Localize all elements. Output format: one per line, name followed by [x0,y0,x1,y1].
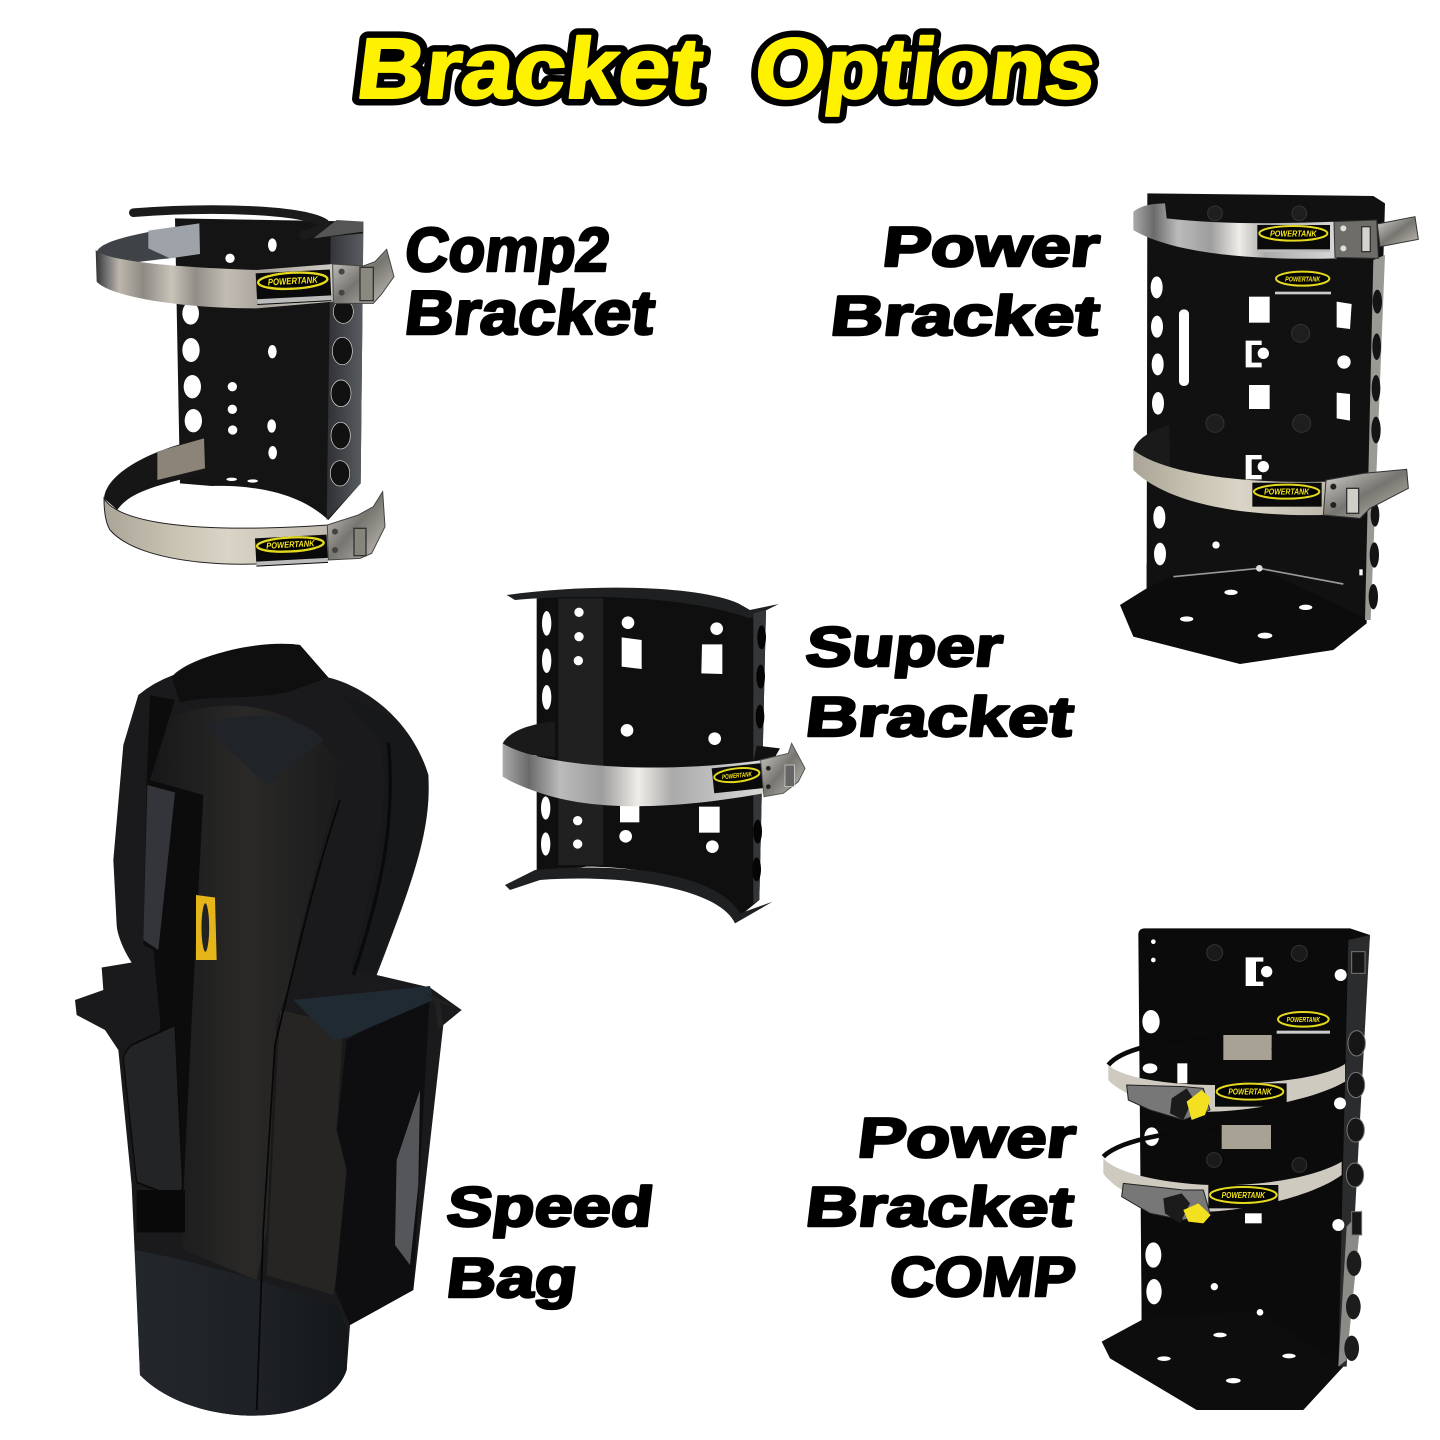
label: Power Bracket COMP: Bracket [803,1175,1078,1238]
product: Super Bracket [503,588,805,923]
left pocket [123,1025,183,1196]
top rubber edge [133,210,326,235]
title: Bracket [352,21,708,117]
wall logo: POWERTANK [1285,274,1321,283]
holes [182,238,277,483]
top handle [172,644,328,702]
bottom logo label [255,535,328,567]
top logo label [1257,225,1330,252]
holes [541,608,723,856]
bottom logo label: POWERTANK [266,538,315,551]
product: Comp2 Bracket [96,210,394,567]
zipper pull [425,992,462,1030]
product: Power Bracket COMP [1102,928,1370,1410]
bottom edge [505,867,773,923]
chevron pattern [203,716,323,785]
wall logo: POWERTANK [1287,1015,1320,1024]
label: Speed Bag [444,1175,657,1309]
holes [1142,939,1347,1316]
label: Power Bracket [828,215,1104,347]
title: Bracket [352,21,708,117]
bottom latch [327,492,385,560]
product: Speed Bag [75,644,462,1416]
studs [1207,945,1307,1172]
top logo label: POWERTANK [268,275,319,287]
yellow tag [196,895,217,960]
lower band [1103,1125,1342,1223]
label: Comp2 Bracket: Bracket [401,279,659,348]
back band [97,223,200,264]
latch [761,743,805,797]
seam [257,800,340,1410]
lower logo label: POWERTANK [1264,488,1310,497]
title: Options [750,21,1101,117]
label: Power Bracket: Bracket [828,284,1104,347]
velcro strap [137,1190,185,1232]
top band [96,250,333,308]
upper band [1108,1035,1346,1120]
mesh highlight [395,1090,420,1265]
upper band: POWERTANK [1228,1088,1273,1097]
strap [143,695,203,1195]
back plate [175,218,363,520]
back plate [1138,928,1370,1367]
side flange [753,610,766,903]
studs [1206,206,1311,432]
side flange [1338,935,1370,1367]
logo label: POWERTANK [722,771,753,781]
band [503,743,763,806]
logo label [712,763,764,793]
bottom band [104,498,328,564]
flange holes [1369,290,1382,609]
strap sheen [143,785,175,950]
base plate [1102,1303,1343,1410]
main body panel [153,706,337,1280]
label: Power Bracket: Power [880,215,1103,278]
lower band back [1133,425,1170,473]
label: Power Bracket COMP: COMP [887,1245,1079,1308]
side flange [1365,255,1385,620]
base holes [1157,1333,1296,1383]
bottom back band [104,438,205,510]
base plate [1120,563,1367,664]
wall logo [1277,1012,1330,1034]
label: Super Bracket: Bracket [803,685,1078,748]
lower band: POWERTANK [1222,1191,1266,1200]
back plate [537,593,766,920]
label: Power Bracket COMP: Power [855,1106,1079,1169]
base band [135,1250,347,1416]
top latch [333,249,394,303]
top band [1133,203,1337,259]
right lower panel [267,1010,353,1295]
lower band [1133,450,1327,515]
label: Super Bracket: Super [803,615,1006,678]
bag silhouette [75,644,462,1416]
top logo label [256,269,332,305]
label: Comp2 Bracket: Comp2 [401,216,614,285]
title: Options [750,21,1101,117]
hood zipper [353,742,390,975]
title [352,21,1101,117]
back plate [1147,193,1385,620]
label: Speed Bag: Speed [444,1175,657,1238]
top latch [1334,217,1418,258]
base holes [1180,590,1312,639]
label: Power Bracket COMP [803,1106,1079,1308]
label: Super Bracket [803,615,1078,748]
top edge [507,588,779,618]
label: Comp2 Bracket [401,216,659,348]
mesh pocket [335,992,430,1325]
product: Power Bracket [1120,193,1418,664]
top logo label: POWERTANK [1270,229,1318,238]
side flange [327,233,363,520]
label: Speed Bag: Bag [444,1246,581,1309]
holes [1151,276,1363,575]
crease lines [1173,568,1343,584]
band back [503,722,555,757]
lighter strip [558,598,603,865]
top mount tab [148,223,200,258]
hood panel [340,695,428,975]
wall logo [1275,272,1331,294]
pocket top band [293,986,433,1040]
lower logo label [1252,483,1322,507]
lower latch [1323,469,1408,518]
